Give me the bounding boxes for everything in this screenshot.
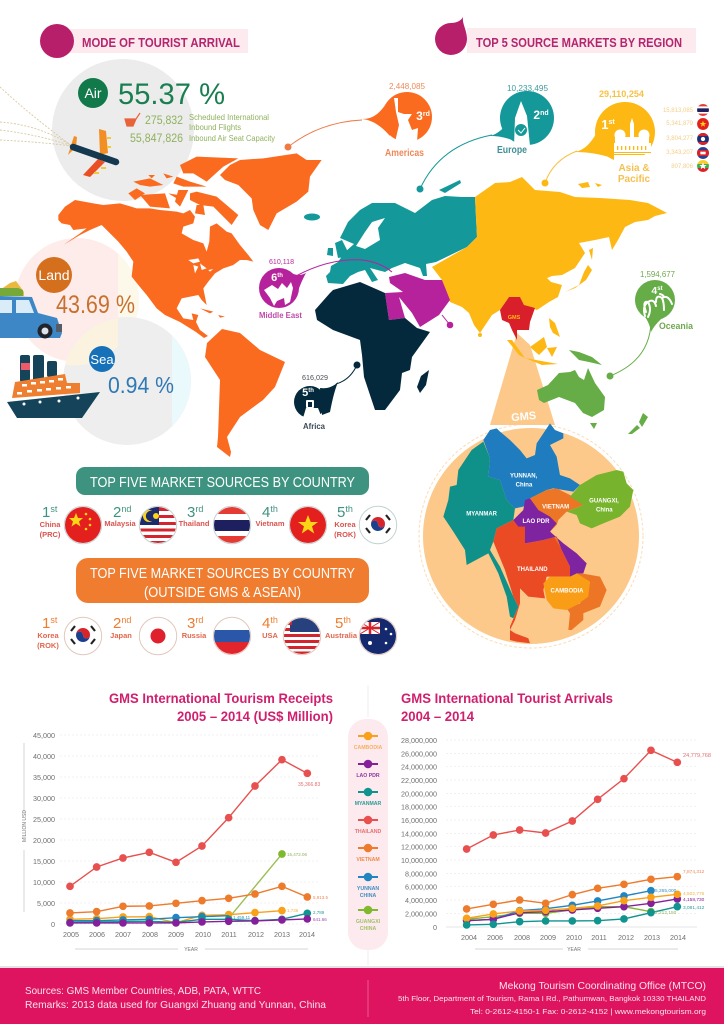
footer	[0, 966, 724, 1024]
title: tourist arrivals: 2004 – 2014	[401, 708, 474, 724]
rank labels: th	[345, 504, 353, 514]
end value labels: 7,874,312	[683, 869, 705, 875]
y axis labels: 4,000,000	[405, 896, 437, 905]
line chart: tourist arrivals	[401, 736, 711, 953]
air badge	[78, 78, 108, 108]
continent: north america	[58, 153, 322, 338]
asia pacific country breakdown: 807,806	[671, 164, 694, 170]
region: GMS on map: GMS	[508, 315, 521, 321]
y axis labels: 26,000,000	[401, 749, 437, 758]
flag russia	[213, 617, 251, 655]
divider	[367, 685, 369, 965]
air badge: Air	[84, 85, 102, 101]
callout: africa: th	[308, 388, 314, 394]
banner: top five by country	[76, 467, 369, 495]
heading: top 5 source markets by region	[435, 17, 696, 55]
callout: middle east: 610,118	[269, 257, 294, 266]
contact details: Tel: 0-2612-4150-1 Fax: 0-2612-4152 | www.mekongtourism.org	[470, 1007, 706, 1016]
x axis labels: 2005	[63, 930, 79, 939]
country names: Russia	[182, 631, 207, 640]
country labels: VIETNAM	[542, 504, 569, 510]
end value labels: 35,366.83	[298, 782, 320, 788]
air figures: Scheduled International	[189, 112, 269, 122]
callout: oceania: 4	[651, 285, 657, 297]
flag vietnam	[289, 506, 327, 544]
axis titles	[22, 743, 308, 953]
rank labels: 1	[42, 615, 50, 632]
region: middle east	[385, 273, 450, 327]
asia pacific country breakdown: 15,813,085	[663, 108, 694, 114]
y axis labels: 10,000,000	[401, 856, 437, 865]
axis titles: MILLION USD	[22, 810, 28, 842]
baltic cutout	[356, 218, 385, 249]
title: tourist arrivals	[401, 690, 613, 724]
rank labels: st	[50, 504, 58, 514]
great lakes cutouts	[188, 258, 213, 273]
y axis labels	[401, 736, 437, 932]
vietnam flag small	[697, 118, 709, 130]
y axis labels: 5,000	[37, 899, 55, 908]
legend: MYANMAR	[355, 801, 382, 807]
country names: USA	[262, 631, 278, 640]
callout: asia and pacific: Asia &	[618, 163, 650, 174]
callout: asia and pacific: Pacific	[618, 174, 651, 185]
country names: Japan	[110, 631, 132, 640]
callout: americas: 3	[416, 109, 423, 123]
legend: VIETNAM	[356, 857, 380, 863]
asia pacific country breakdown	[663, 104, 709, 172]
end value labels	[233, 782, 329, 922]
flag china	[64, 506, 102, 544]
y axis labels	[33, 731, 55, 929]
x axis labels: 2008	[514, 933, 530, 942]
end value labels: 24,779,768	[683, 753, 711, 759]
flag korea	[64, 617, 102, 655]
icon: ship	[7, 355, 100, 418]
y axis labels: 18,000,000	[401, 803, 437, 812]
x axis labels: 2013	[644, 933, 660, 942]
callout: americas: 2,448,085	[389, 81, 425, 91]
legend: CHINA	[360, 926, 376, 932]
callout: oceania: 1,594,677	[640, 269, 675, 279]
rank labels: rd	[195, 615, 203, 625]
y axis labels: 6,000,000	[405, 883, 437, 892]
country names: Korea	[37, 631, 59, 640]
end value labels: 2,212,150	[655, 910, 677, 916]
x axis labels	[63, 930, 315, 939]
end value labels: 1,459.11	[233, 915, 251, 920]
legend: GUANGXI	[356, 919, 381, 925]
asia pacific country breakdown: 5,341,879	[666, 121, 694, 127]
callout: asia and pacific: 1	[601, 117, 608, 132]
y axis labels: 40,000	[33, 752, 55, 761]
country labels: THAILAND	[517, 567, 548, 573]
callout: europe: 2	[533, 108, 540, 122]
callout: europe	[416, 83, 554, 192]
callout: asia and pacific: st	[608, 119, 615, 126]
callout: europe: nd	[540, 110, 549, 117]
background circle: air	[52, 59, 194, 201]
region: oceania	[537, 350, 648, 434]
rank labels: 3	[187, 504, 195, 521]
line chart: tourism receipts	[22, 731, 329, 953]
country names: China	[40, 520, 61, 529]
callout: asia and pacific	[542, 89, 655, 186]
country names	[37, 631, 358, 650]
rank labels: 4	[262, 504, 270, 521]
country names: Thailand	[179, 519, 210, 528]
title: tourist arrivals: GMS International Tourist Arrivals	[401, 690, 613, 706]
legend	[348, 719, 388, 950]
callout: europe: 10,233,495	[507, 83, 548, 93]
end value labels: 4,502,775	[683, 891, 705, 897]
region: africa	[315, 282, 430, 410]
banner: top five outside GMS and ASEAN: (OUTSIDE GMS & ASEAN)	[144, 584, 301, 601]
GMS zoom wedge and circle: GMS	[511, 410, 537, 424]
callout: americas: rd	[423, 111, 430, 118]
vietnam	[530, 488, 607, 630]
thailand	[493, 520, 570, 643]
rank labels: rd	[195, 504, 203, 514]
y axis labels: 20,000	[33, 836, 55, 845]
air mode stats	[78, 78, 276, 145]
guangxi	[567, 470, 633, 528]
air percent: 55.37 %	[118, 78, 225, 111]
rank labels: nd	[121, 615, 131, 625]
callout: middle east	[259, 257, 453, 328]
callout: asia and pacific: 29,110,254	[599, 89, 644, 99]
title: tourism receipts: 2005 – 2014 (US$ Million)	[177, 708, 333, 724]
ranking row: overall countries	[40, 504, 397, 544]
country labels: YUNNAN,	[510, 474, 538, 480]
flag korea	[359, 506, 397, 544]
sea mode stats	[89, 346, 174, 398]
title: tourism receipts: GMS International Tourism Receipts	[109, 690, 333, 706]
myanmar	[443, 442, 518, 618]
background circle: sea	[63, 317, 191, 445]
country labels: LAO PDR	[523, 519, 550, 525]
sea percent: 0.94 %	[108, 372, 174, 398]
x axis labels: 2011	[221, 930, 237, 939]
icon: camel	[264, 282, 293, 306]
region: europe and russia	[304, 180, 477, 284]
region: GMS on map	[500, 297, 535, 340]
region: asia and pacific	[432, 177, 667, 365]
end value labels: 15,472.06	[287, 852, 308, 857]
heading: mode of tourist arrival: MODE OF TOURIST ARRIVAL	[82, 35, 240, 50]
air figures	[130, 112, 276, 145]
country names: (PRC)	[40, 530, 61, 539]
heading: top 5 source markets by region: TOP 5 SOURCE MARKETS BY REGION	[476, 35, 682, 50]
rank labels: th	[343, 615, 351, 625]
air figures: 55,847,826	[130, 131, 183, 145]
end value labels: 4,158,730	[683, 897, 705, 903]
end value labels: 1,736	[287, 908, 299, 913]
flag usa	[283, 617, 321, 655]
country labels: MYANMAR	[466, 512, 498, 518]
sources and remarks: Sources: GMS Member Countries, ADB, PATA, WTTC	[25, 985, 261, 997]
end value labels: 641.66	[313, 917, 327, 922]
y axis labels: 0	[433, 923, 437, 932]
title: tourism receipts	[109, 690, 333, 724]
y axis labels: 16,000,000	[401, 816, 437, 825]
legend: LAO PDR	[356, 773, 380, 779]
country names: Korea	[334, 520, 356, 529]
x axis labels: 2004	[461, 933, 477, 942]
banner: top five outside GMS and ASEAN	[76, 558, 369, 603]
end value labels	[655, 753, 711, 916]
icon: mosque	[614, 118, 652, 165]
y axis labels: 24,000,000	[401, 763, 437, 772]
sources and remarks: Remarks: 2013 data used for Guangxi Zhuang and Yunnan, China	[25, 999, 326, 1011]
rank labels: 2	[113, 615, 121, 632]
callout: middle east: th	[277, 273, 283, 279]
x axis labels: 2012	[618, 933, 634, 942]
y axis labels: 28,000,000	[401, 736, 437, 745]
air figures: 275,832	[145, 113, 183, 127]
x axis labels: 2013	[274, 930, 290, 939]
callout: oceania: st	[657, 286, 663, 292]
contact details: Mekong Tourism Coordinating Office (MTCO)	[499, 980, 706, 992]
flag thailand	[213, 506, 251, 544]
callout: africa	[294, 362, 360, 431]
x axis labels: 2011	[591, 933, 607, 942]
legend: CHINA	[360, 893, 376, 899]
rank labels: nd	[121, 504, 131, 514]
x axis labels: 2014	[670, 933, 686, 942]
rank labels: 3	[187, 615, 195, 632]
callout: middle east: Middle East	[259, 310, 302, 320]
country names: Vietnam	[255, 519, 285, 528]
land mode stats	[36, 257, 135, 319]
GMS zoom wedge and circle	[419, 333, 643, 648]
callout: middle east: 6	[271, 272, 277, 284]
y axis labels: 30,000	[33, 794, 55, 803]
contact details	[398, 980, 707, 1016]
end value labels: 5,913.5	[313, 895, 329, 900]
lao pdr	[513, 498, 587, 580]
legend: YUNNAN	[357, 886, 379, 892]
y axis labels: 8,000,000	[405, 869, 437, 878]
end value labels: 5,265,000	[655, 888, 677, 894]
yunnan	[483, 423, 580, 508]
y axis labels: 25,000	[33, 815, 55, 824]
end value labels: 3,081,412	[683, 905, 705, 911]
GMS detail map	[443, 423, 633, 643]
world map	[58, 153, 667, 457]
country labels: GUANGXI,	[589, 499, 619, 505]
y axis labels: 12,000,000	[401, 843, 437, 852]
background circle: land	[15, 238, 139, 362]
land badge: Land	[38, 267, 70, 283]
cambodia	[543, 573, 590, 610]
x axis labels: 2007	[115, 930, 131, 939]
x axis labels: 2010	[566, 933, 582, 942]
country names: (ROK)	[37, 641, 59, 650]
rank labels	[42, 504, 353, 521]
rank labels: th	[270, 615, 278, 625]
y axis labels: 35,000	[33, 773, 55, 782]
thailand flag small	[697, 104, 709, 116]
callout: oceania	[606, 269, 694, 380]
callout: oceania: Oceania	[659, 321, 694, 332]
rank labels: 2	[113, 504, 121, 521]
flag japan	[139, 617, 177, 655]
heading: mode of tourist arrival	[40, 24, 248, 58]
rank labels	[42, 615, 351, 632]
axis titles: YEAR	[184, 947, 198, 953]
x axis labels: 2006	[89, 930, 105, 939]
x axis labels: 2014	[299, 930, 315, 939]
country labels: China	[596, 507, 613, 513]
axis title: YEAR	[567, 947, 581, 953]
x axis labels: 2010	[195, 930, 211, 939]
country names: Australia	[325, 631, 358, 640]
x axis labels: 2009	[168, 930, 184, 939]
cart icon	[125, 113, 140, 126]
banner: top five by country: TOP FIVE MARKET SOURCES BY COUNTRY	[90, 474, 355, 491]
callout: americas	[284, 81, 432, 159]
callout: americas: Americas	[385, 148, 424, 159]
callout: africa: Africa	[303, 421, 325, 431]
end value labels: 2,789	[313, 910, 325, 915]
callout: europe: Europe	[497, 145, 527, 156]
x axis labels: 2008	[142, 930, 158, 939]
country labels	[466, 474, 619, 594]
rank labels: st	[50, 615, 58, 625]
ranking row: outside GMS and ASEAN	[37, 615, 397, 655]
rank labels: 4	[262, 615, 270, 632]
flag australia	[359, 617, 397, 655]
myanmar flag small	[697, 160, 709, 172]
x axis labels: 2009	[540, 933, 556, 942]
continent: south america	[205, 329, 285, 457]
data series	[467, 750, 677, 925]
y axis labels: 2,000,000	[405, 909, 437, 918]
rank labels: 5	[337, 504, 345, 521]
laos flag small	[697, 133, 709, 145]
rank labels: 5	[335, 615, 343, 632]
legend: CAMBODIA	[354, 745, 383, 751]
y axis labels: 10,000	[33, 878, 55, 887]
y axis labels: 0	[51, 920, 55, 929]
air figures: Inbound Air Seat Capacity	[189, 133, 276, 143]
air figures: Inbound Flights	[189, 122, 241, 132]
icon: statue of liberty	[394, 98, 418, 142]
y axis labels: 15,000	[33, 857, 55, 866]
x axis labels	[461, 933, 686, 942]
legend: THAILAND	[355, 829, 382, 835]
country names	[40, 519, 356, 539]
asia pacific country breakdown: 3,343,207	[666, 150, 694, 156]
asia pacific country breakdown: 3,804,277	[666, 136, 694, 142]
y axis labels: 14,000,000	[401, 829, 437, 838]
contact details: 5th Floor, Department of Tourism, Rama I Rd., Pathumwan, Bangkok 10330 THAILAND	[398, 994, 707, 1003]
country labels: CAMBODIA	[551, 588, 584, 594]
x axis labels: 2006	[487, 933, 503, 942]
banner: top five outside GMS and ASEAN: TOP FIVE MARKET SOURCES BY COUNTRY	[90, 565, 355, 582]
icon: big ben	[514, 101, 530, 146]
land percent: 43.69 %	[56, 291, 135, 319]
data series	[70, 760, 307, 923]
icon: car with luggage	[0, 281, 62, 338]
callout: africa: 616,029	[302, 373, 328, 382]
cambodia flag small	[697, 147, 709, 159]
sources and remarks	[25, 985, 326, 1011]
country names: (ROK)	[334, 530, 356, 539]
rank labels: 1	[42, 504, 50, 521]
icon: palm trees	[644, 294, 672, 317]
y axis labels: 45,000	[33, 731, 55, 740]
rank labels: th	[270, 504, 278, 514]
country labels: China	[516, 482, 533, 488]
x axis labels: 2012	[248, 930, 264, 939]
icon: airplane with trails	[0, 87, 116, 177]
sea badge: Sea	[90, 352, 114, 367]
callout: africa: 5	[302, 387, 308, 399]
country names: Malaysia	[104, 519, 136, 528]
flag malaysia	[139, 506, 177, 544]
y axis labels: 22,000,000	[401, 776, 437, 785]
y axis labels: 20,000,000	[401, 789, 437, 798]
